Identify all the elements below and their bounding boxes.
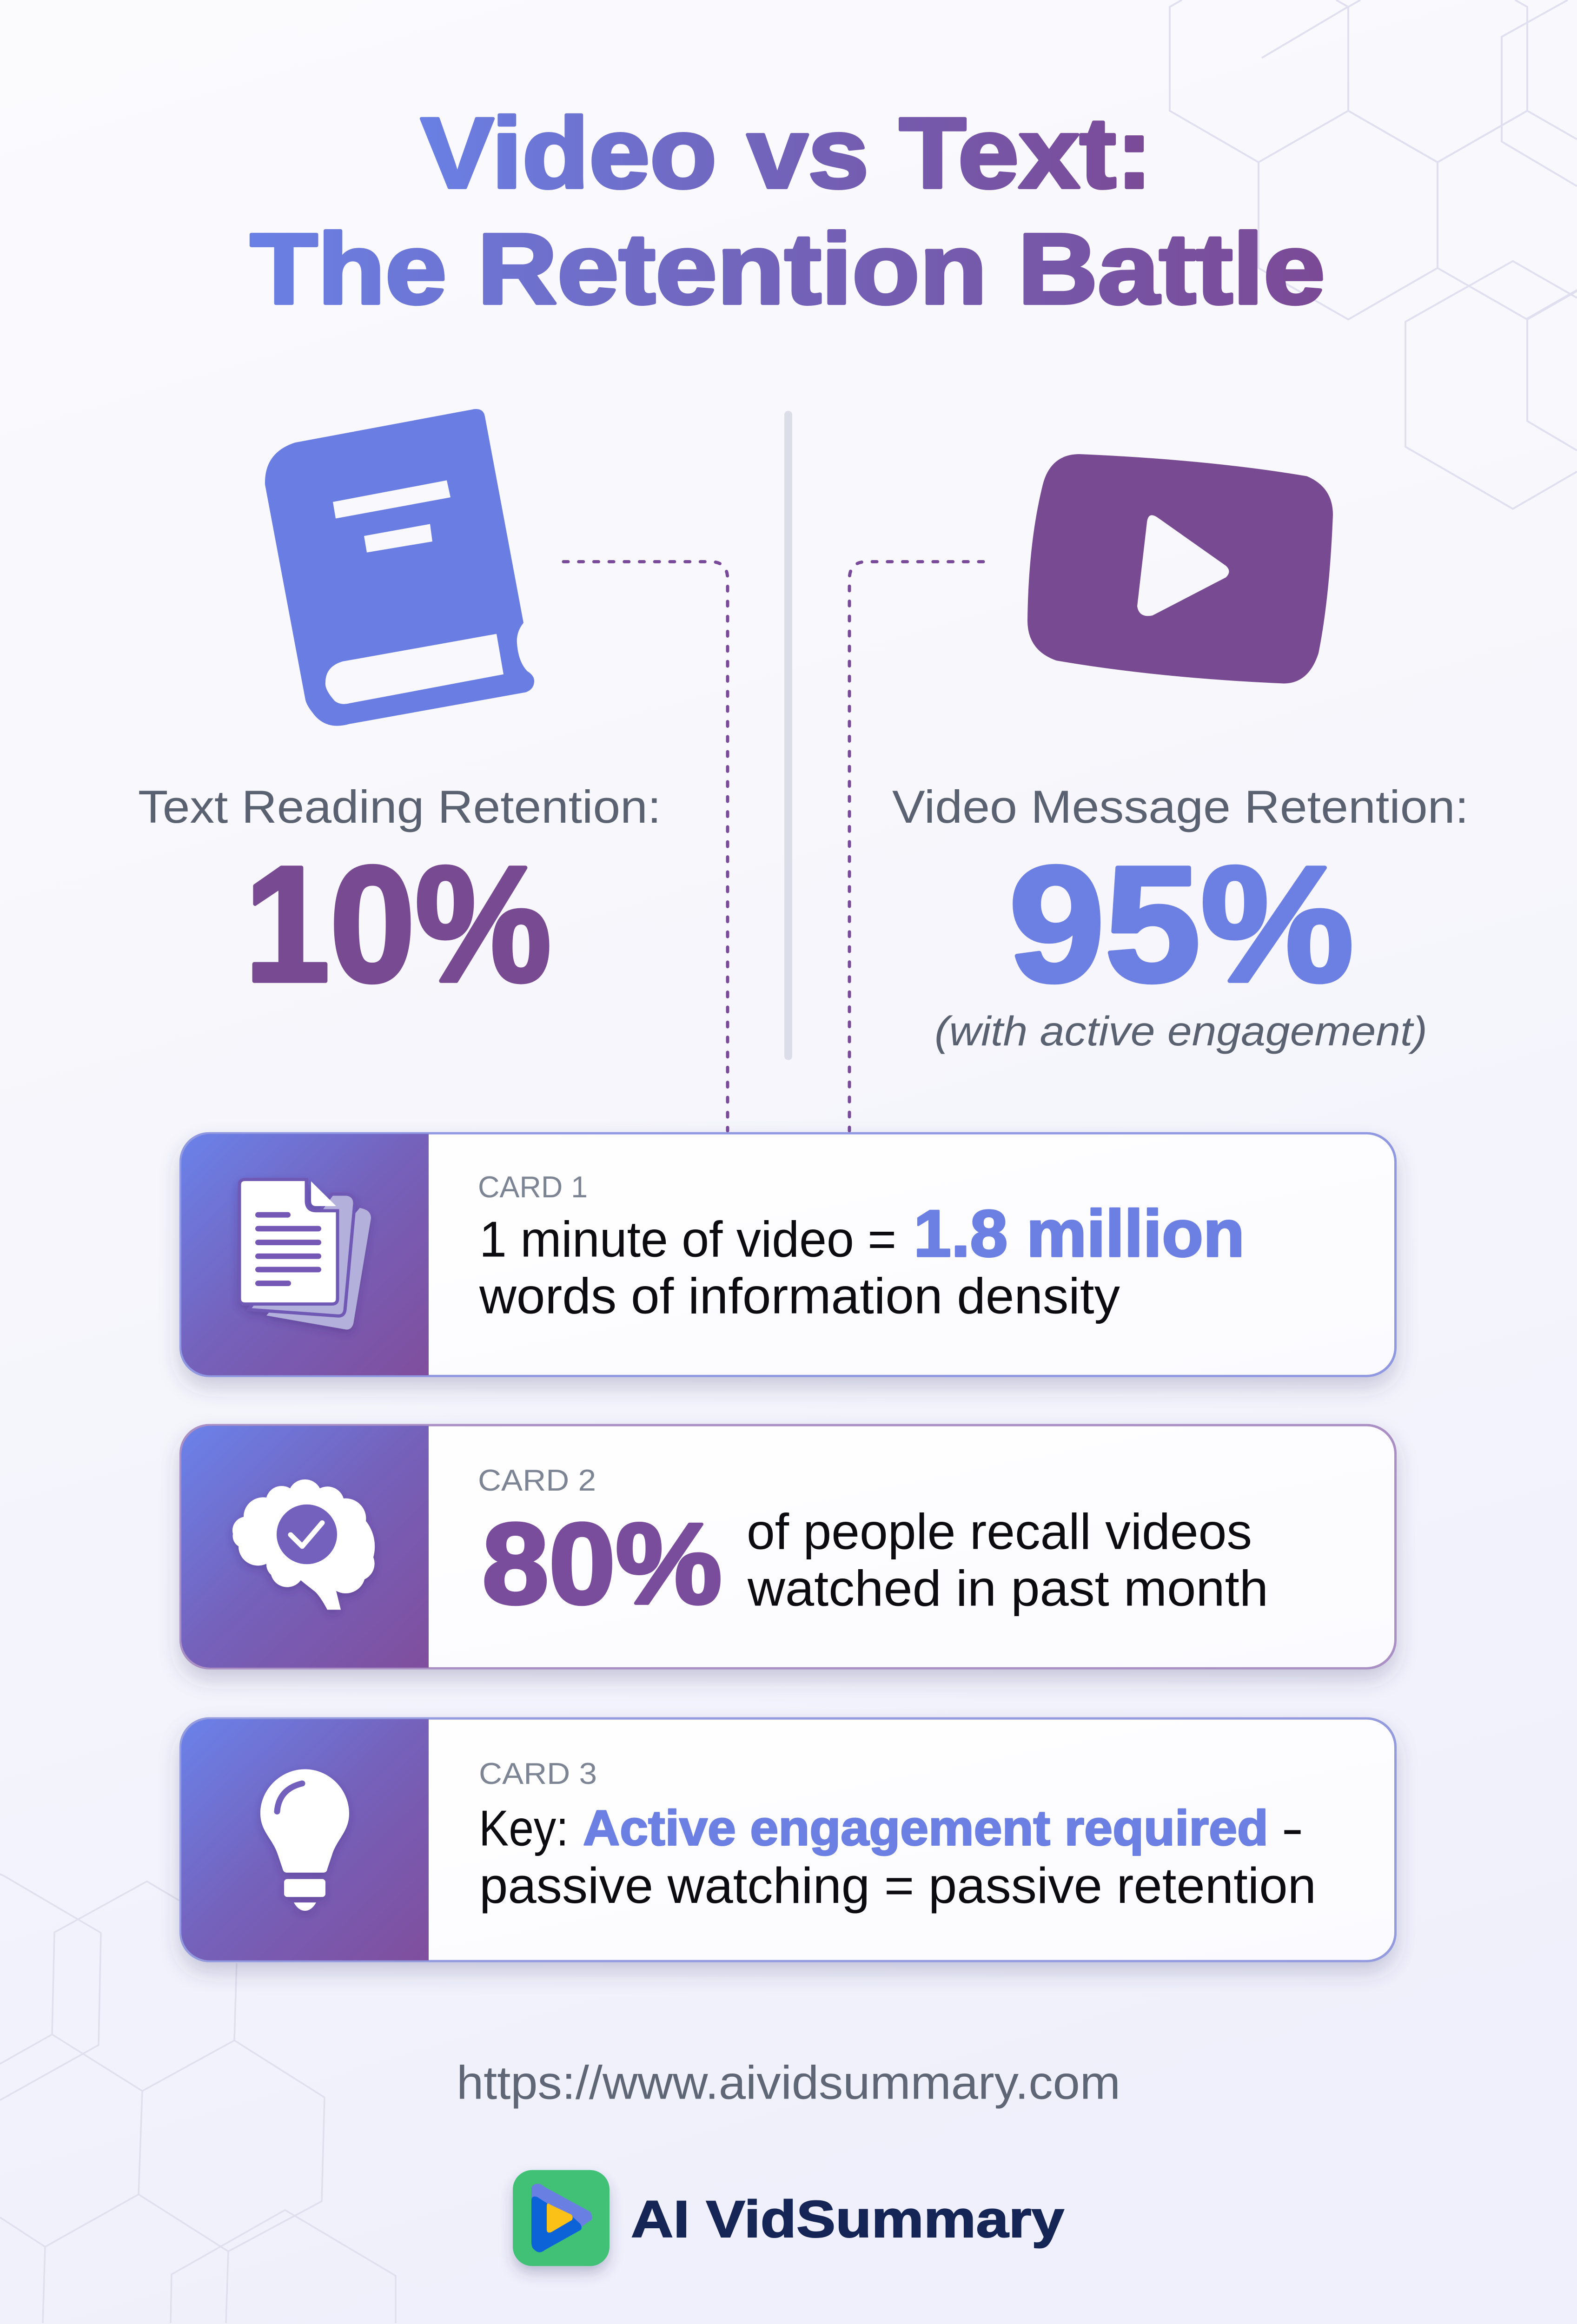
card 3 dash: -: [1281, 1800, 1304, 1856]
central divider: [784, 411, 792, 1060]
card 1 text line 2: words of information density: [479, 1268, 1120, 1324]
stat: 10%: 10%: [245, 832, 551, 1016]
label: video message retention: Video Message Retention:: [892, 782, 1469, 833]
card 2 frame: [179, 1424, 1397, 1670]
card 3 highlight: Active engagement required: [583, 1800, 1268, 1855]
card 1: [179, 1132, 1397, 1377]
stat: 95%: 95%: [1009, 832, 1354, 1016]
connector: book to cards: [563, 561, 728, 1131]
card 1 text line 1: 1 minute of video =: [479, 1211, 896, 1268]
card 3 label: CARD 3: [479, 1756, 597, 1790]
title line 2: The Retention Battle: [250, 213, 1325, 324]
panel: text reading stat: [138, 782, 661, 1016]
icon: video play button: [1027, 454, 1333, 684]
stat: 80%: 80%: [482, 1499, 722, 1628]
card 2 text line 2: watched in past month: [747, 1560, 1268, 1617]
title line 1: Video vs Text:: [421, 97, 1153, 209]
panel: video message stat: [892, 782, 1469, 1054]
card 2 label: CARD 2: [478, 1463, 596, 1497]
card 3 frame: [179, 1717, 1397, 1962]
card 3 text line 2: passive watching = passive retention: [479, 1858, 1316, 1914]
note: with active engagement: (with active engagement): [934, 1008, 1427, 1054]
icon: light bulb: [260, 1769, 349, 1911]
brand logo: [513, 2170, 1064, 2266]
icon: book: [265, 409, 534, 726]
card 1 highlight: 1.8 million: [914, 1196, 1245, 1271]
card 1 frame: [179, 1132, 1397, 1377]
card 2: [179, 1424, 1397, 1670]
label: text reading retention: Text Reading Retention:: [138, 782, 661, 833]
card 3 key prefix: Key:: [479, 1800, 569, 1856]
website url: https://www.aividsummary.com: [457, 2057, 1120, 2109]
title: [250, 97, 1325, 324]
card 3: [179, 1717, 1397, 1962]
connector: video to cards: [849, 561, 983, 1131]
icon: document stack: [239, 1180, 371, 1329]
icon: brain with check: [232, 1479, 375, 1610]
logo wordmark: AI VidSummary: [631, 2190, 1064, 2249]
card 1 label: CARD 1: [478, 1170, 588, 1204]
card 2 text line 1: of people recall videos: [747, 1504, 1252, 1560]
logo icon: [513, 2170, 610, 2266]
